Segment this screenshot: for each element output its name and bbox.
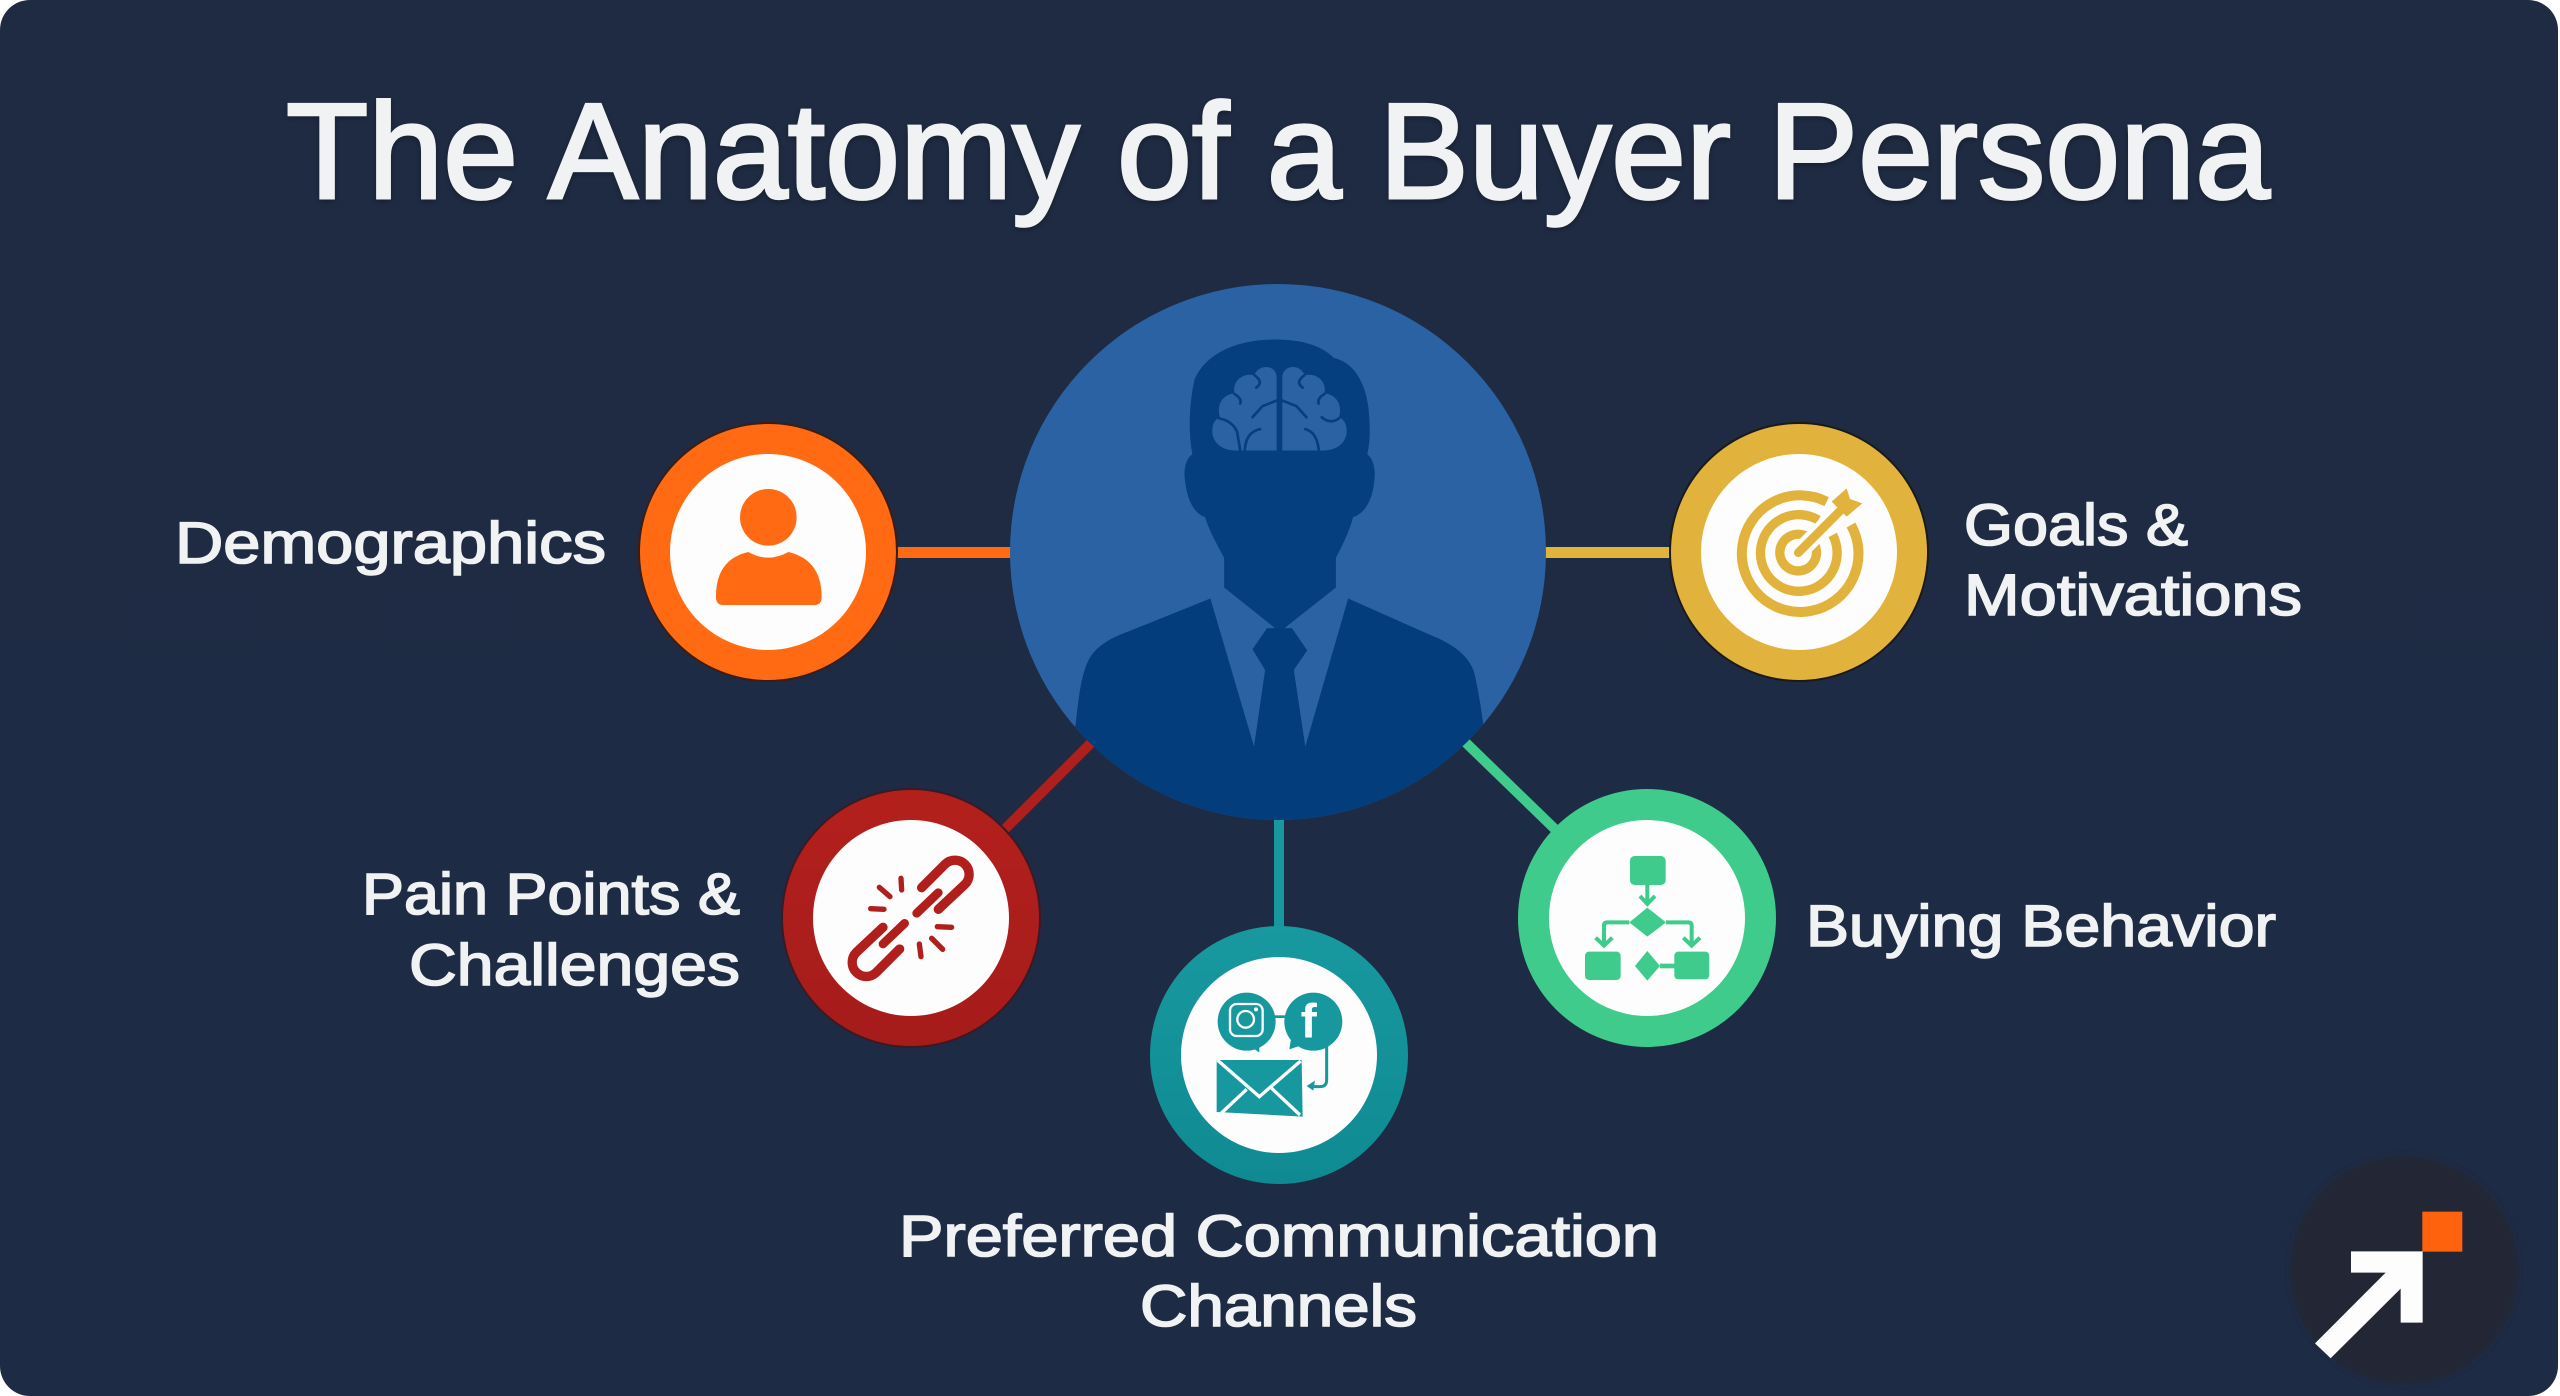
connector: demographics <box>890 547 1020 558</box>
label: preferred communication channels <box>899 1204 1659 1339</box>
connector: pain points <box>1000 739 1095 834</box>
icon: arrow with orange square <box>2315 1212 2462 1358</box>
node: buying behavior <box>1518 789 1776 1047</box>
icon: social and email <box>1217 993 1342 1117</box>
label: preferred communication channels: Channels <box>1140 1274 1417 1339</box>
logo badge <box>2290 1156 2518 1384</box>
node: preferred communication channels <box>1150 926 1408 1184</box>
label: pain points and challenges: Challenges <box>409 933 740 998</box>
icon: flowchart <box>1585 856 1709 981</box>
icon: target with arrow <box>1742 488 1862 612</box>
connector: goals <box>1540 547 1670 558</box>
connector: communication <box>1274 815 1284 935</box>
icon: person <box>716 489 822 605</box>
silhouette with brain <box>1075 340 1484 820</box>
node: goals and motivations <box>1670 423 1928 681</box>
label: goals and motivations: Motivations <box>1964 563 2302 628</box>
icon: broken chain <box>852 860 969 976</box>
central persona circle <box>1010 284 1546 852</box>
title: The Anatomy of a Buyer Persona <box>286 75 2270 227</box>
brain <box>1212 367 1347 451</box>
label: demographics: Demographics <box>175 511 606 576</box>
node: demographics <box>639 423 897 681</box>
node: pain points <box>782 789 1040 1047</box>
label: preferred communication channels: Preferred Communication <box>899 1204 1659 1269</box>
label: goals and motivations: Goals & <box>1964 493 2188 558</box>
label: pain points and challenges <box>362 862 740 998</box>
connector: buying behavior <box>1462 739 1560 834</box>
label: pain points and challenges: Pain Points & <box>362 862 740 927</box>
label: buying behavior: Buying Behavior <box>1806 894 2276 959</box>
label: goals and motivations <box>1964 493 2302 628</box>
icon: social and email: f <box>1301 995 1318 1049</box>
